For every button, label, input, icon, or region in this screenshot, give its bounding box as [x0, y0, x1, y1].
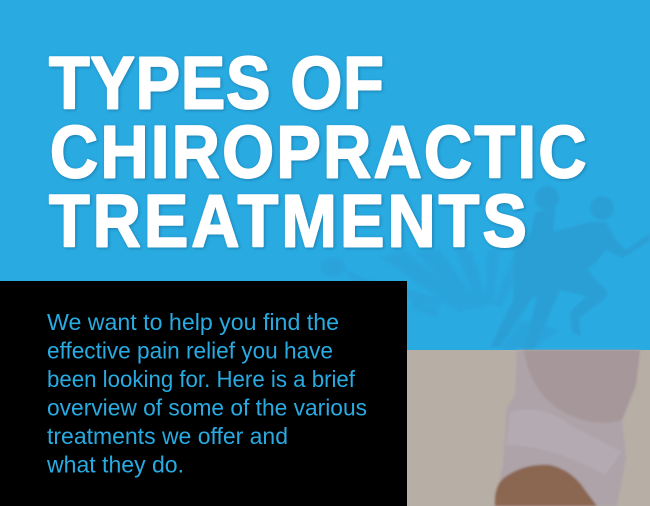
- blue header background: [0, 0, 650, 350]
- intro text: overview of some of the various: [47, 394, 367, 420]
- title: TYPES OF: [49, 41, 384, 124]
- intro text: what they do.: [46, 452, 184, 478]
- intro text: [46, 309, 367, 478]
- sleeve: [495, 350, 640, 506]
- black intro panel: [0, 281, 407, 506]
- photo: arm in white sleeve: [407, 350, 650, 506]
- silhouette: running figures watermark: [320, 186, 650, 350]
- intro text: effective pain relief you have: [47, 338, 333, 364]
- forearm skin: [495, 465, 597, 506]
- title: CHIROPRACTIC: [50, 110, 586, 193]
- intro text: been looking for. Here is a brief: [47, 366, 356, 392]
- intro text: treatments we offer and: [47, 423, 288, 449]
- title: [49, 41, 586, 262]
- title: TREATMENTS: [49, 179, 527, 262]
- intro text: We want to help you find the: [47, 309, 339, 335]
